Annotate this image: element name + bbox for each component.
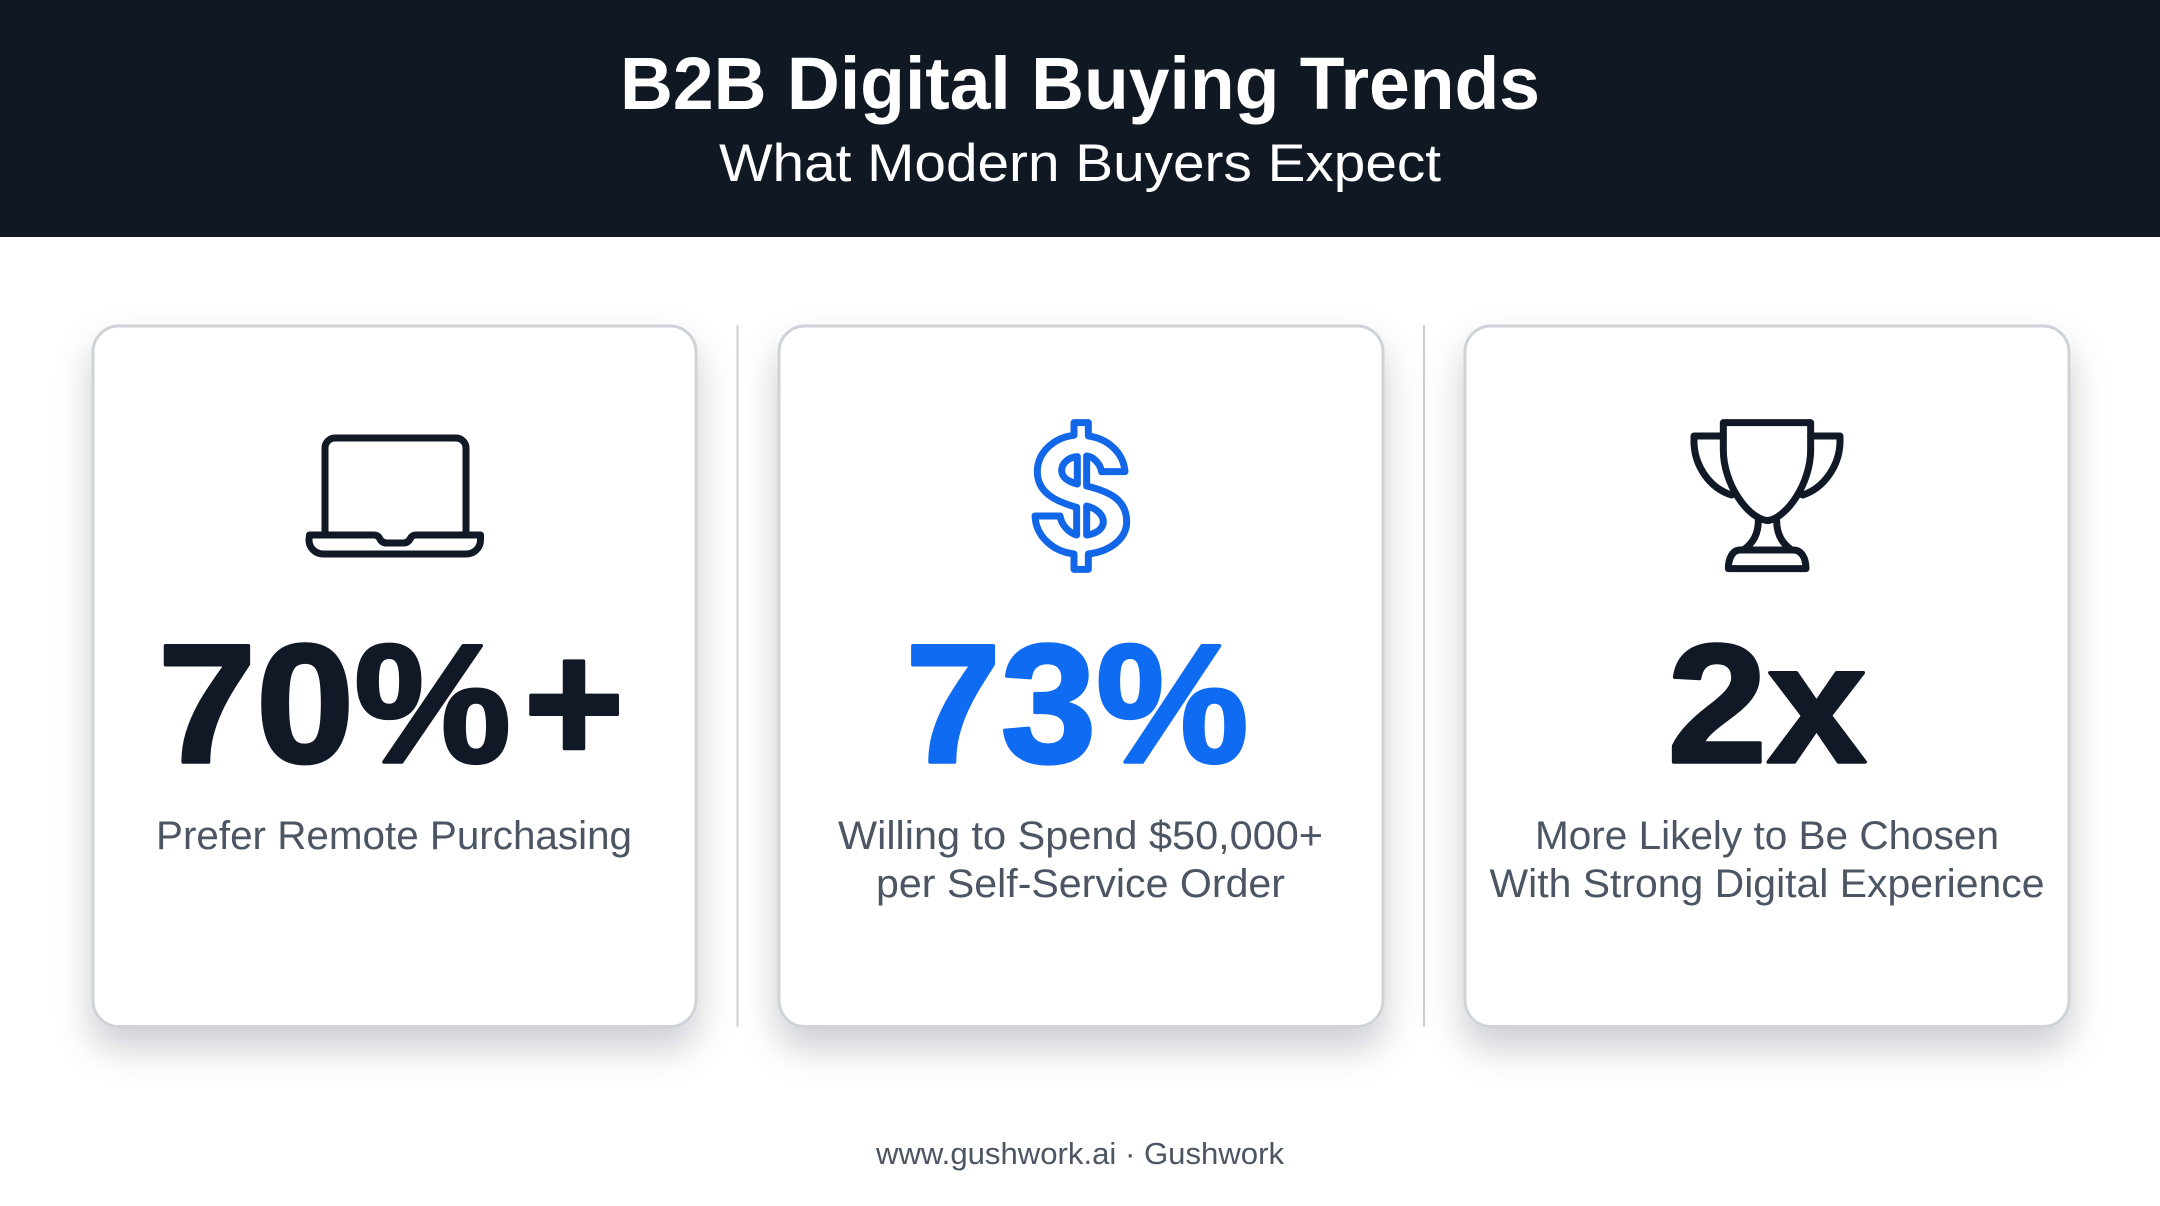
icon: laptop bbox=[309, 438, 480, 554]
stat: 70%+: 70% bbox=[158, 609, 511, 798]
panel: self-service spend bbox=[779, 326, 1383, 1026]
label: willing to spend: Willing to Spend $50,000+ bbox=[838, 814, 1323, 858]
footer: www.gushwork.ai · Gushwork bbox=[875, 1136, 1284, 1171]
header band bbox=[0, 0, 2160, 237]
subtitle: What Modern Buyers Expect bbox=[719, 134, 1441, 193]
label: prefer remote purchasing: Prefer Remote Purchasing bbox=[156, 814, 632, 858]
label: more likely to be chosen: With Strong Digital Experience bbox=[1490, 862, 2044, 906]
icon: dollar sign bbox=[1035, 423, 1127, 569]
stat: 2x: 2x bbox=[1668, 609, 1866, 798]
label: willing to spend: per Self-Service Order bbox=[876, 862, 1285, 906]
panel: remote purchasing bbox=[93, 326, 696, 1026]
label: more likely to be chosen: More Likely to Be Chosen bbox=[1535, 814, 1999, 858]
stat: 70%+: + bbox=[524, 607, 624, 799]
panel: digital experience bbox=[1465, 326, 2069, 1026]
label: more likely to be chosen bbox=[1490, 814, 2044, 906]
stat: 73%: 73% bbox=[906, 609, 1248, 798]
icon: trophy bbox=[1694, 423, 1840, 569]
title: B2B Digital Buying Trends bbox=[620, 42, 1540, 125]
label: willing to spend bbox=[838, 814, 1323, 906]
